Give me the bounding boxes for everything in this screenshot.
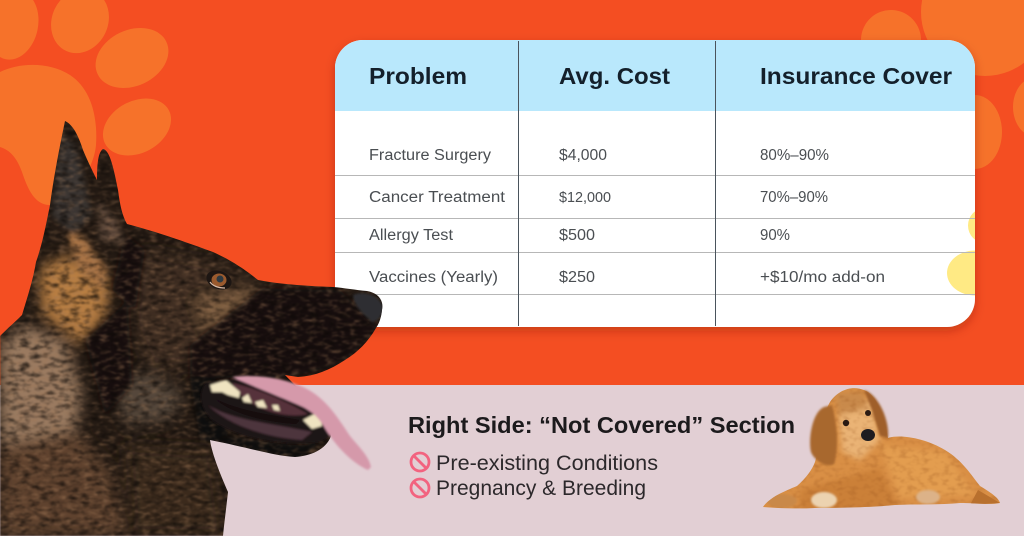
illustration: golden puppy — [763, 388, 1000, 508]
list item: Pregnancy & Breeding — [436, 476, 646, 500]
dog tongue — [232, 376, 371, 470]
list item: Pre-existing Conditions — [436, 451, 658, 475]
bottom band — [0, 385, 1024, 536]
table rows: $500 — [559, 227, 595, 244]
dog eye — [204, 267, 234, 293]
paw print: top left — [0, 0, 181, 205]
dog mouth — [201, 376, 371, 470]
puppy ears — [810, 405, 837, 465]
table column headings: Avg. Cost — [559, 63, 670, 89]
icon: prohibited — [411, 479, 429, 497]
puppy paws — [767, 494, 797, 508]
table rows: Fracture Surgery — [369, 147, 491, 164]
table rows: Cancer Treatment — [369, 189, 506, 206]
table rows: 90% — [760, 227, 790, 244]
table header band — [335, 40, 1003, 296]
puppy body — [763, 388, 1000, 508]
panel: cost table — [335, 40, 1003, 327]
table rows: Allergy Test — [369, 227, 454, 244]
table card — [335, 40, 975, 327]
puppy face — [843, 410, 875, 441]
table column headings — [369, 63, 952, 89]
table column headings: Problem — [369, 63, 467, 89]
paw print: top right — [853, 0, 1024, 169]
table rows: $4,000 — [559, 147, 607, 164]
table rows: 80%–90% — [760, 147, 829, 164]
icon: prohibited — [411, 453, 429, 471]
table rows: 70%–90% — [760, 189, 828, 206]
table rows: Vaccines (Yearly) — [369, 269, 498, 286]
subheading: not covered: Right Side: “Not Covered” Section — [408, 412, 795, 438]
table rules — [335, 176, 975, 294]
table rows — [369, 147, 885, 286]
table rows: $12,000 — [559, 189, 611, 206]
list: not covered items — [411, 451, 658, 500]
dog teeth — [210, 380, 322, 429]
table rows: $250 — [559, 269, 595, 286]
dog fur — [0, 110, 400, 536]
table rows: +$10/mo add-on — [760, 269, 885, 286]
illustration: German shepherd — [0, 110, 400, 536]
dog nose — [353, 293, 383, 322]
background: orange-red — [0, 0, 1024, 386]
table column headings: Insurance Cover — [760, 63, 952, 89]
